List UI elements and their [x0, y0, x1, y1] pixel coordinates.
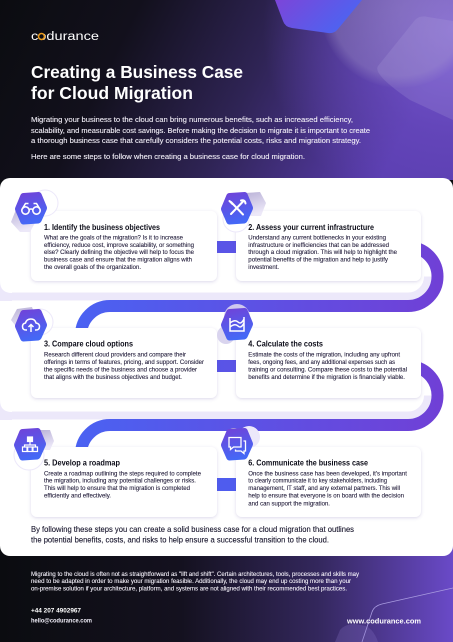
intro text: Migrating your business to the cloud can bring numerous benefits, such as increased efficiency,	[31, 115, 353, 124]
step 5 card: the migration, including any potential challenges or risks.	[44, 478, 196, 485]
step 1 card: business case and ensure that the migration aligns with	[44, 257, 192, 264]
step 3 card: that aligns with the business objectives and budget.	[44, 374, 182, 381]
footer disclaimer: need to be adapted in order to make your migration feasible. Additionally, the cloud may end up costing more than your	[31, 579, 351, 585]
icon: chat bubbles	[221, 428, 253, 460]
title	[31, 62, 243, 103]
icon: binoculars	[15, 192, 47, 224]
icon: cloud upload	[15, 309, 47, 342]
logo: codurance	[31, 31, 99, 43]
intro text: Here are some steps to follow when creating a business case for cloud migration.	[31, 152, 305, 161]
step 2 card	[221, 192, 421, 281]
step 3 card	[11, 307, 217, 398]
step 6 card	[221, 426, 421, 517]
step 6 card: 6. Communicate the business case	[248, 459, 369, 468]
title: Creating a Business Case	[31, 62, 243, 82]
step 2 card: Understand any current bottlenecks in your existing	[248, 235, 386, 242]
step 1 card	[11, 190, 217, 281]
contact details	[31, 608, 92, 625]
step 3 card: offerings in terms of features, pricing, and support. Consider	[44, 359, 205, 366]
step 1 card: 1. Identify the business objectives	[44, 223, 161, 232]
step 5 card: efficiently and effectively.	[44, 492, 111, 500]
step 4 card: training or consulting. Compare these costs to the potential	[248, 366, 407, 374]
icon: hierarchy	[14, 428, 46, 460]
step 2 card: potential benefits of the migration and help to justify	[248, 257, 389, 264]
step 3 card: Research different cloud providers and compare their	[44, 352, 187, 359]
step 2 card: investment.	[248, 264, 279, 271]
step 4 card	[217, 304, 421, 398]
step 6 card: to clearly communicate it to key stakeholders, including	[248, 478, 387, 485]
step 2 card: through a cloud migration. This will help to highlight the	[248, 249, 397, 256]
step 6 card: and can support the migration.	[248, 500, 330, 508]
footer disclaimer	[31, 572, 359, 593]
closing text: By following these steps you can create a solid business case for a cloud migration that outlines	[31, 525, 354, 534]
intro text: a thorough business case that carefully considers the potential costs, risks and migration strategy.	[31, 136, 361, 145]
step 2 card: infrastructure or inefficiencies that can be addressed	[248, 242, 389, 249]
ribbon connector: step 1 to 3	[81, 247, 438, 335]
ribbon connector: step 3 to 5	[81, 366, 438, 454]
title: for Cloud Migration	[31, 83, 193, 103]
step 1 card: else? Clearly defining the objective will help to focus the	[44, 249, 194, 256]
ribbon connector: step 5 to 6	[216, 478, 246, 491]
closing text	[31, 525, 354, 544]
step 5 card: Create a roadmap outlining the steps required to complete	[44, 470, 201, 477]
footer background	[0, 540, 453, 642]
step 1 card: What are the goals of the migration? Is it to increase	[44, 235, 183, 242]
step 1 card: the overall goals of the organization.	[44, 264, 141, 271]
step 3 card: 3. Compare cloud options	[44, 340, 134, 349]
contact details: +44 207 4902967	[31, 608, 81, 615]
header background	[0, 0, 453, 180]
intro text	[31, 115, 370, 161]
step 5 card: This will help to ensure that the migration is completed	[44, 485, 190, 492]
step 6 card: Once the business case has been developed, it's important	[248, 470, 407, 477]
website: www.codurance.com	[346, 617, 422, 626]
footer disclaimer: Migrating to the cloud is often not as straightforward as "lift and shift". Certain architectures, tools, processes and skills may	[31, 572, 359, 578]
step 4 card: Estimate the costs of the migration, including any upfront	[248, 352, 400, 359]
step 3 card: the specific needs of the business and choose a provider	[44, 366, 198, 374]
step 1 card: efficiency, reduce cost, improve scalability, or something	[44, 242, 194, 249]
step 2 card: 2. Assess your current infrastructure	[248, 223, 375, 232]
step 4 card: 4. Calculate the costs	[248, 340, 324, 349]
contact details: hello@codurance.com	[31, 619, 92, 625]
step 5 card: 5. Develop a roadmap	[44, 459, 120, 468]
intro text: scalability, and measurable cost savings. Before making the decision to migrate it is important to create	[31, 126, 370, 135]
step 4 card: benefits and determine if the migration is financially viable.	[248, 374, 405, 381]
footer disclaimer: on-premise solution if your architecture, platform, and systems are not aligned with their recommended best practices.	[31, 587, 347, 593]
icon: area chart	[221, 308, 253, 340]
icon: tools	[221, 192, 253, 224]
white steps panel	[0, 178, 453, 556]
step 6 card: management, IT staff, and any external partners. This will	[248, 485, 400, 492]
closing text: the potential benefits, costs, and risks to help ensure a successful transition to the cloud.	[31, 535, 329, 544]
step 5 card	[14, 428, 217, 517]
step 6 card: help to ensure that everyone is on board with the decision	[248, 492, 404, 500]
step 4 card: fees, ongoing fees, and any additional expenses such as	[248, 359, 396, 366]
